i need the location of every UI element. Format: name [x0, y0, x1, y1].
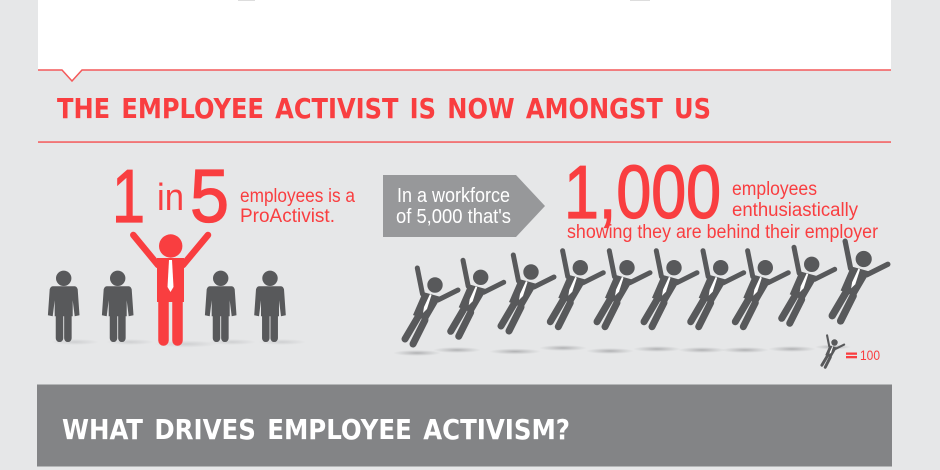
icon: grey person 2 — [102, 271, 134, 338]
white intro panel with notch — [38, 0, 891, 81]
ground shadows under row of people — [51, 339, 306, 348]
icon: grey person 4 — [254, 271, 286, 338]
heading: the employee activist: THE EMPLOYEE ACTIVIST IS NOW AMONGST US — [57, 92, 711, 125]
legend: one figure equals 100 — [822, 335, 880, 367]
stat: 1,000 employees: employees — [732, 179, 817, 200]
stat: 1 in 5: 5 — [190, 154, 229, 238]
stat: 1 in 5: ProActivist. — [240, 206, 335, 227]
stat: 1,000 employees: 1,000 — [564, 150, 721, 234]
stat: 1,000 employees: showing they are behind their employer — [567, 222, 879, 243]
icon: grey person 3 — [205, 271, 236, 338]
heading rule — [38, 141, 891, 143]
stat: 1,000 employees: enthusiastically — [732, 200, 858, 221]
stat: 1 in 5: employees is a — [240, 186, 355, 207]
icon: red activist with raised arms — [133, 234, 208, 340]
stat: 1 in 5: in — [157, 177, 184, 219]
arrow callout: workforce of 5,000 — [383, 175, 545, 237]
stat: 1,000 employees — [564, 150, 879, 243]
icon: grey person 1 — [48, 271, 80, 338]
heading: what drives employee activism: WHAT DRIVES EMPLOYEE ACTIVISM? — [62, 413, 570, 446]
legend: one figure equals 100: 100 — [860, 347, 880, 363]
jump shadows — [393, 344, 851, 356]
arrow callout: workforce of 5,000: In a workforce — [397, 185, 510, 207]
arrow callout: workforce of 5,000: of 5,000 that's — [396, 206, 511, 228]
stat: 1 in 5 — [112, 154, 355, 238]
grey section bar — [37, 384, 892, 466]
jumping people row — [405, 241, 888, 344]
stat: 1 in 5: 1 — [112, 154, 145, 238]
